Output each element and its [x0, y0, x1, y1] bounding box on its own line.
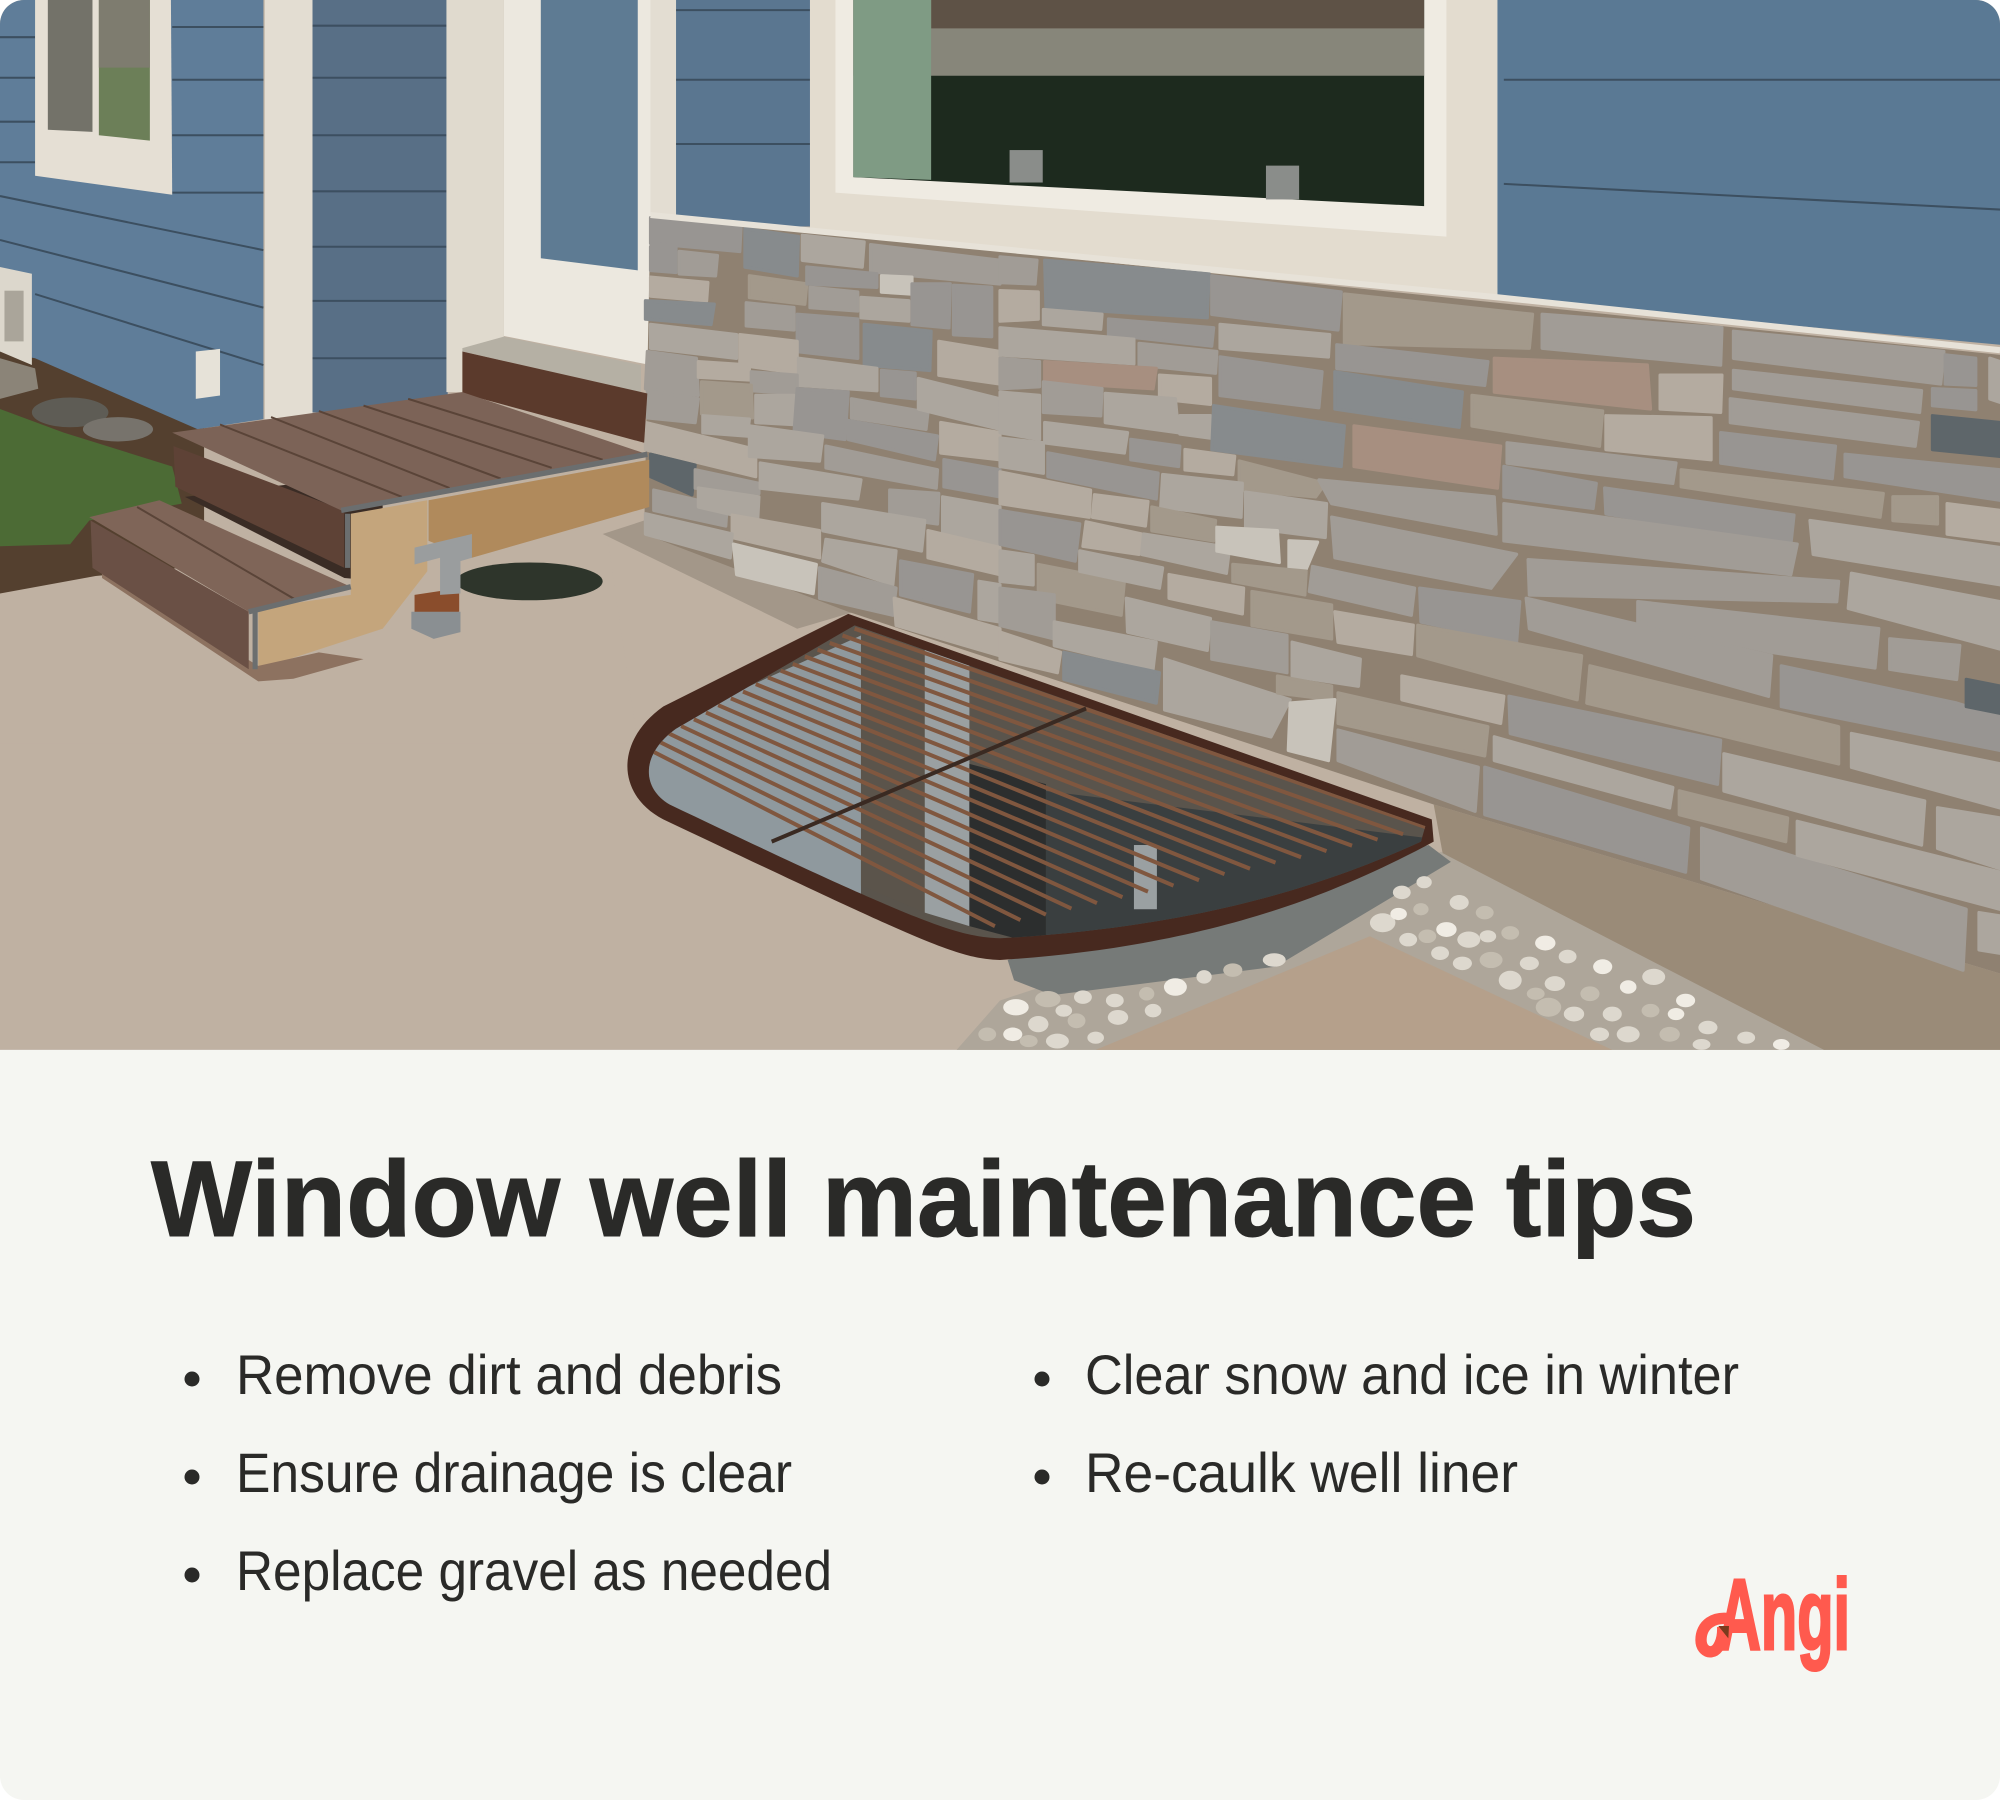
- background panel: [0, 1050, 2000, 1800]
- well liner: [1008, 845, 1451, 995]
- tips list: right column: [1034, 1354, 1738, 1492]
- paver slab: [1096, 936, 1612, 1050]
- white corner post: [265, 0, 313, 419]
- blue siding walls: [0, 0, 2000, 429]
- photo: house exterior with window well: [0, 0, 2000, 1050]
- wall vents: [0, 267, 220, 399]
- stone veneer wall: [644, 215, 2000, 973]
- entry step: [89, 337, 649, 681]
- well interior and grate: [648, 626, 1426, 938]
- gravel stones: [978, 876, 1790, 1050]
- window well: [606, 608, 1499, 995]
- gravel bed and foundation: [603, 521, 2000, 1050]
- stones: right part: [1000, 257, 2000, 970]
- tip: remove dirt and debris: Remove dirt and debris: [236, 1343, 782, 1406]
- concrete patio: [0, 0, 2000, 1050]
- tip: re-caulk well liner: Re-caulk well liner: [1085, 1441, 1518, 1504]
- tip: clear snow and ice: [1034, 1354, 1738, 1394]
- left window: [35, 0, 172, 195]
- tip: clear snow and ice: Clear snow and ice in winter: [1085, 1343, 1739, 1406]
- tips list: left column: [184, 1343, 832, 1602]
- big window: [810, 0, 1497, 295]
- tip: replace gravel as needed: Replace gravel as needed: [236, 1539, 832, 1602]
- tip: re-caulk well liner: [1034, 1452, 1518, 1492]
- door and door frame: [446, 0, 676, 392]
- tip: remove dirt and debris: [184, 1354, 780, 1394]
- trim above stone wall: [651, 215, 2000, 350]
- title: Window well maintenance tips: [151, 1138, 1696, 1259]
- Angi logo: Angi: [1718, 1559, 1850, 1671]
- mulch and grass bed: [0, 352, 204, 594]
- Angi logo: [1695, 1575, 1847, 1672]
- well frame: [627, 614, 1434, 960]
- tip: ensure drainage is clear: Ensure drainage is clear: [236, 1441, 792, 1504]
- stones: left part: [645, 218, 1000, 656]
